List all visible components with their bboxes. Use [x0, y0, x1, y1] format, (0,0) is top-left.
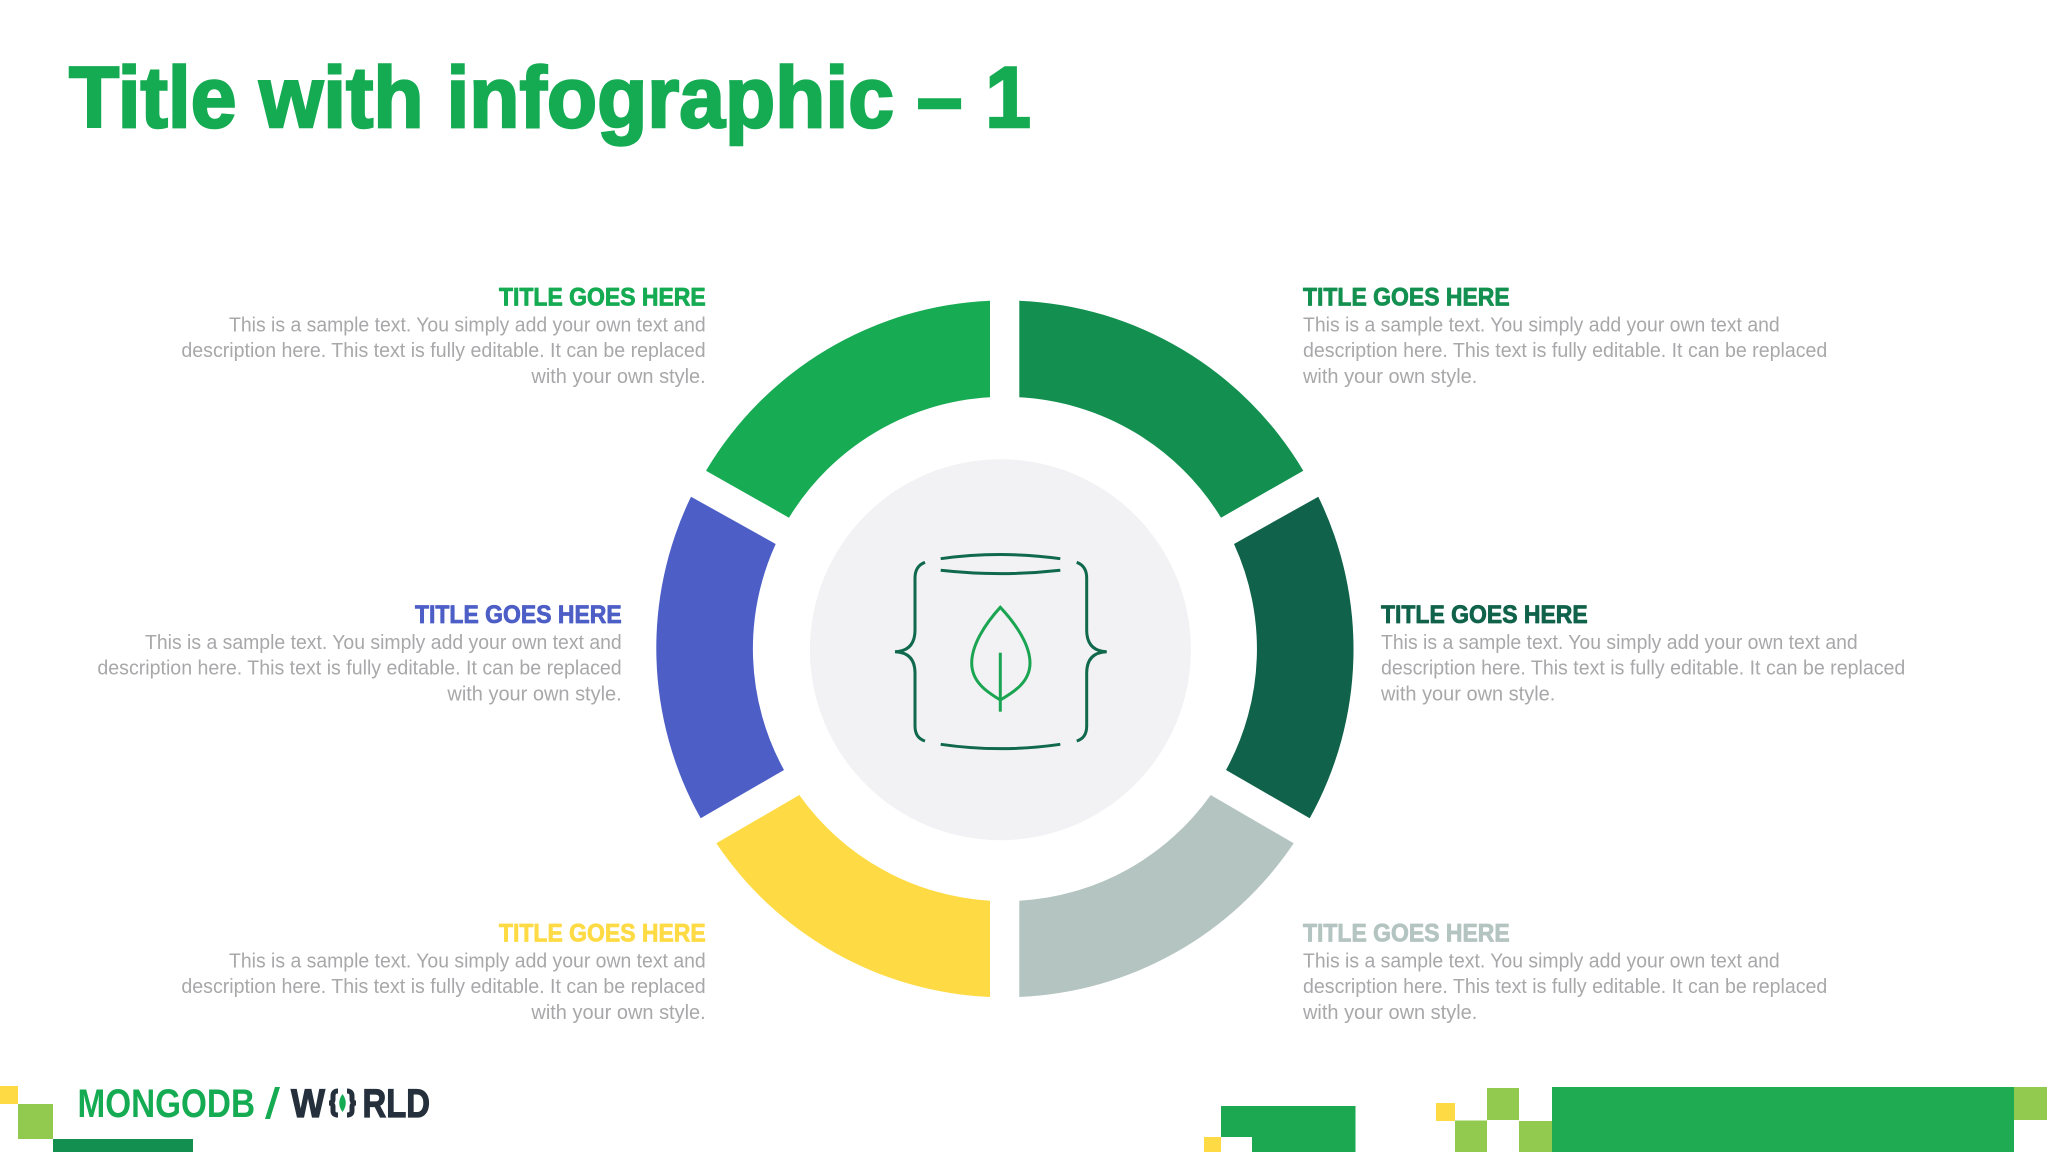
body: middle left: This is a sample text. You simply add your own text and [145, 631, 622, 654]
body: top left: description here. This text is fully editable. It can be replaced [181, 339, 706, 362]
heading: middle left: TITLE GOES HERE [415, 601, 622, 629]
body: top right: This is a sample text. You simply add your own text and [1303, 313, 1780, 336]
body: middle right: with your own style. [1380, 682, 1555, 706]
heading: bottom left: TITLE GOES HERE [499, 920, 706, 948]
body: middle left: description here. This text is fully editable. It can be replaced [97, 657, 622, 680]
heading: top left: TITLE GOES HERE [499, 284, 706, 312]
body: bottom right: This is a sample text. You simply add your own text and [1303, 949, 1780, 972]
text block: top right [1302, 284, 1827, 388]
body: bottom right: with your own style. [1302, 1001, 1477, 1024]
body: bottom right [1302, 949, 1827, 1024]
segment: bottom right grey [1019, 795, 1294, 997]
body: bottom left: description here. This text is fully editable. It can be replaced [181, 975, 706, 998]
footer pixel decoration: left [0, 1086, 193, 1152]
heading: top right: TITLE GOES HERE [1303, 284, 1510, 312]
text block: top left [181, 284, 706, 388]
body: bottom left: This is a sample text. You simply add your own text and [229, 949, 706, 972]
logo icon: braces with leaf [329, 1091, 356, 1115]
segment: left blue [656, 497, 784, 818]
logo slash [265, 1087, 280, 1119]
text block: bottom right [1302, 920, 1827, 1024]
logo text: RLD: RLD [362, 1082, 430, 1126]
body: top left: with your own style. [530, 365, 706, 388]
body: bottom left: with your own style. [530, 1001, 706, 1024]
footer pixel decoration: center [1204, 1106, 1356, 1152]
body: middle right: This is a sample text. You simply add your own text and [1381, 631, 1858, 654]
segment: bottom left yellow [716, 795, 990, 997]
center circle [810, 459, 1191, 840]
segment: top right dark green [1019, 301, 1303, 518]
body: middle left [97, 631, 622, 706]
body: top left [181, 313, 706, 388]
title: Title with infographic – 1 [69, 50, 1031, 146]
icon: database and braces outline [895, 555, 1107, 749]
body: middle left: with your own style. [446, 682, 622, 706]
body: bottom right: description here. This text is fully editable. It can be replaced [1303, 975, 1827, 998]
logo: MongoDB World [78, 1082, 430, 1126]
logo text: W: W [291, 1082, 325, 1126]
logo text: MONGODB: MONGODB [78, 1082, 255, 1126]
heading: bottom right: TITLE GOES HERE [1303, 920, 1510, 948]
icon: database with curly braces and leaf [895, 555, 1107, 749]
donut ring chart [656, 301, 1354, 997]
text block: middle left [97, 601, 622, 706]
body: top right [1302, 313, 1827, 388]
body: top left: This is a sample text. You simply add your own text and [229, 313, 706, 336]
footer pixel decoration: right [1436, 1087, 2047, 1152]
body: middle right [1380, 631, 1905, 706]
segment: right deep green [1226, 497, 1354, 818]
body: bottom left [181, 949, 706, 1024]
heading: middle right: TITLE GOES HERE [1381, 601, 1588, 629]
segment: top left green [706, 301, 990, 518]
text block: bottom left [181, 920, 706, 1024]
text block: middle right [1380, 601, 1905, 706]
body: top right: with your own style. [1302, 365, 1477, 388]
body: top right: description here. This text is fully editable. It can be replaced [1303, 339, 1827, 362]
icon: leaf [972, 607, 1030, 712]
body: middle right: description here. This text is fully editable. It can be replaced [1381, 657, 1905, 680]
